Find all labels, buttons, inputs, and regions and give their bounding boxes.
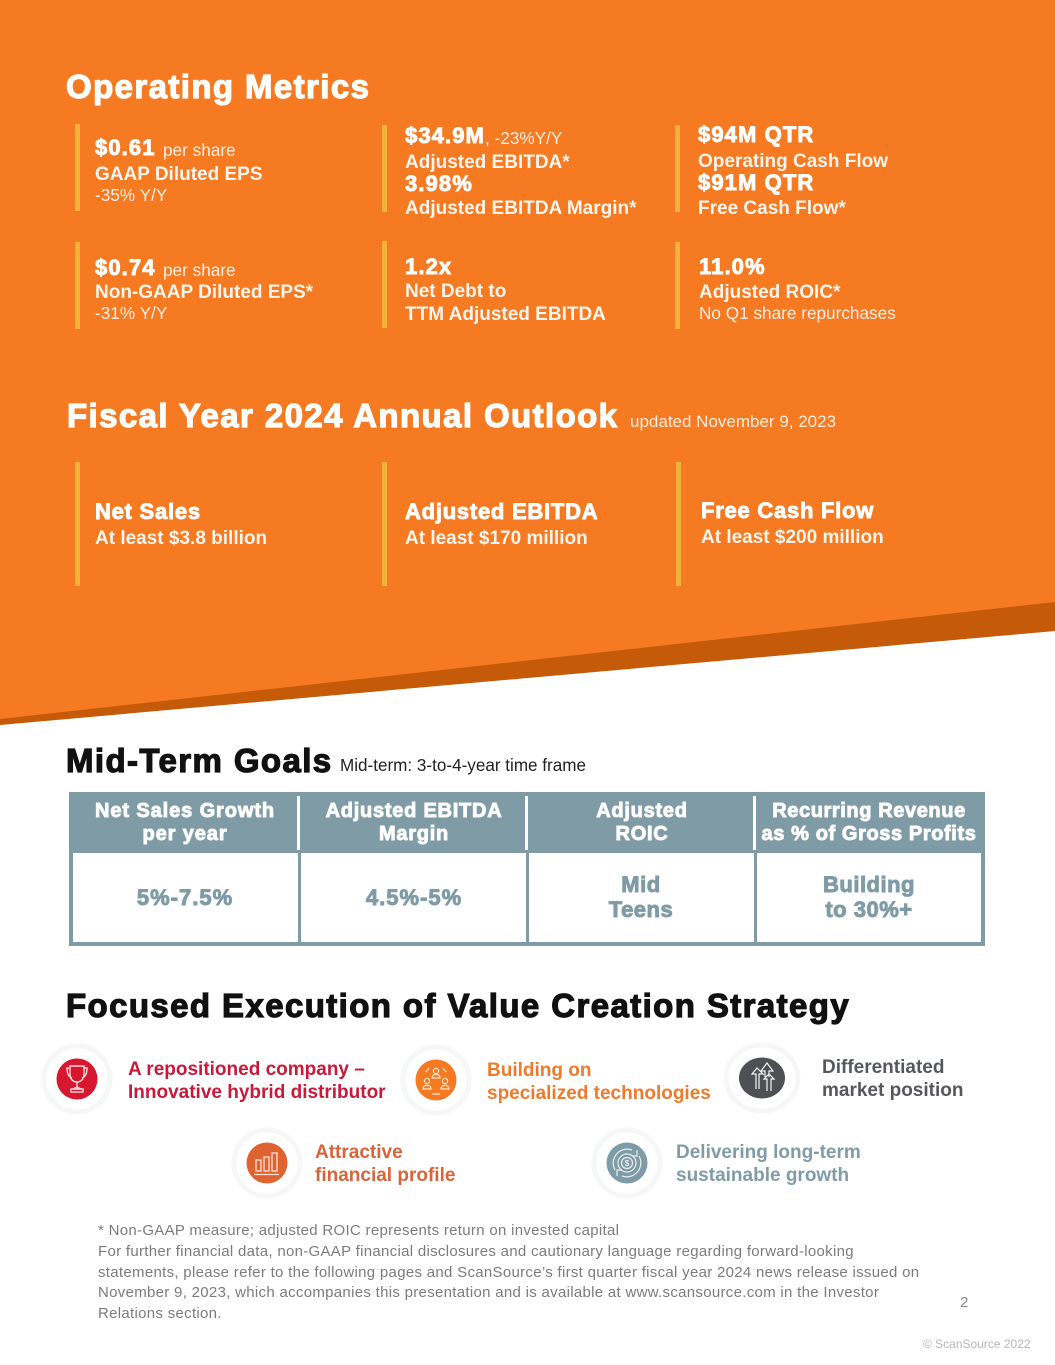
- column 3: [596, 800, 688, 845]
- table: mid-term goals: Building: [823, 872, 915, 897]
- outlook: Net Sales: [75, 462, 267, 586]
- heading: Mid-Term Goals: Mid-term: 3-to-4-year time frame: [340, 756, 586, 775]
- metric: Net Debt to TTM Adjusted EBITDA: 1.2x: [405, 254, 452, 279]
- metric: Adjusted EBITDA: , -23%Y/Y: [485, 128, 562, 148]
- strategy item: repositioned company: Innovative hybrid distributor: [128, 1082, 386, 1103]
- metric: Net Debt to TTM Adjusted EBITDA: Net Debt to: [405, 281, 506, 302]
- icon: circular dollar: $: [625, 1159, 630, 1168]
- metric: GAAP Diluted EPS: GAAP Diluted EPS: [95, 164, 263, 185]
- metric: Operating Cash Flow and Free Cash Flow: Free Cash Flow*: [698, 198, 846, 219]
- table body cell backgrounds: [73, 853, 298, 942]
- metric: Net Debt to TTM Adjusted EBITDA: TTM Adjusted EBITDA: [405, 304, 606, 325]
- column 4: Recurring Revenue: [772, 800, 966, 822]
- outlook: Net Sales: Net Sales: [95, 499, 201, 524]
- page number: 2: [960, 1294, 968, 1311]
- icon: trophy: [42, 1044, 112, 1114]
- metric: Adjusted ROIC: 11.0%: [699, 254, 766, 279]
- metric: GAAP Diluted EPS: $0.61: [95, 135, 156, 160]
- table: mid-term goals: to 30%+: [825, 897, 913, 922]
- metric: Operating Cash Flow and Free Cash Flow: Operating Cash Flow: [698, 151, 888, 172]
- strategy item: specialized technologies: specialized technologies: [487, 1083, 711, 1104]
- outlook: Adjusted EBITDA: Adjusted EBITDA: [405, 499, 598, 524]
- outlook: Adjusted EBITDA: At least $170 million: [405, 528, 588, 549]
- metric: Operating Cash Flow and Free Cash Flow: $94M QTR: [698, 122, 814, 147]
- table: mid-term goals: [69, 792, 985, 946]
- metric: Non-GAAP Diluted EPS: -31% Y/Y: [95, 303, 167, 323]
- metric: Adjusted EBITDA: Adjusted EBITDA*: [405, 152, 570, 173]
- metric: Non-GAAP Diluted EPS: Non-GAAP Diluted EPS*: [95, 282, 313, 303]
- strategy item: differentiated market position: market position: [822, 1080, 963, 1101]
- footnote text: statements, please refer to the following pages and ScanSource’s first quarter fiscal year 2024 news release issued on: [98, 1264, 919, 1281]
- heading: Focused Execution of Value Creation Strategy: Focused Execution of Value Creation Strategy: [66, 987, 850, 1024]
- strategy item: repositioned company: A repositioned company –: [128, 1059, 365, 1080]
- metric: Adjusted EBITDA: $34.9M: [405, 123, 485, 148]
- metric: Non-GAAP Diluted EPS: [75, 242, 314, 329]
- icon: bar chart: [232, 1128, 302, 1198]
- footnote text: November 9, 2023, which accompanies this presentation and is available at www.scansource.com in the Investor: [98, 1284, 879, 1301]
- column 1: [95, 800, 275, 845]
- metric: Adjusted ROIC: No Q1 share repurchases: [699, 303, 896, 323]
- orange banner background: [0, 0, 1055, 725]
- metric: Non-GAAP Diluted EPS: per share: [163, 260, 236, 280]
- heading: Mid-Term Goals: Mid-Term Goals: [66, 742, 333, 779]
- table: mid-term goals: Mid: [621, 872, 661, 897]
- footnote text: Relations section.: [98, 1305, 222, 1322]
- heading: Fiscal Year 2024 Annual Outlook: Fiscal Year 2024 Annual Outlook: [67, 397, 618, 434]
- heading: Operating Metrics: Operating Metrics: [66, 68, 370, 105]
- metric: Operating Cash Flow and Free Cash Flow: [675, 122, 888, 219]
- strategy item: long-term sustainable growth: [592, 1128, 861, 1198]
- metric: Non-GAAP Diluted EPS: $0.74: [95, 255, 156, 280]
- metric: Operating Cash Flow and Free Cash Flow: $91M QTR: [698, 170, 814, 195]
- icon: circular dollar: [592, 1128, 662, 1198]
- table: mid-term goals: 5%-7.5%: [137, 885, 233, 910]
- outlook: Free Cash Flow: At least $200 million: [701, 527, 884, 548]
- strategy item: long-term sustainable growth: Delivering long-term: [676, 1142, 861, 1163]
- footnote text: * Non-GAAP measure; adjusted ROIC represents return on invested capital: [98, 1222, 619, 1239]
- table: mid-term goals: 4.5%-5%: [366, 885, 462, 910]
- column 2: Adjusted EBITDA: [326, 800, 502, 822]
- strategy item: attractive financial profile: Attractive: [315, 1142, 403, 1163]
- outlook: Adjusted EBITDA: [382, 462, 598, 586]
- strategy item: differentiated market position: Differentiated: [822, 1057, 944, 1078]
- outlook: Net Sales: At least $3.8 billion: [95, 528, 267, 549]
- metric: Adjusted EBITDA: [382, 123, 637, 219]
- strategy item: specialized technologies: [400, 1044, 711, 1116]
- metric: Adjusted EBITDA: Adjusted EBITDA Margin*: [405, 198, 637, 219]
- table: mid-term goals: Teens: [609, 897, 673, 922]
- strategy item: attractive financial profile: financial profile: [315, 1165, 455, 1186]
- metric: Adjusted EBITDA: 3.98%: [405, 171, 473, 196]
- heading: Fiscal Year 2024 Annual Outlook: updated November 9, 2023: [630, 412, 836, 431]
- column 4: as % of Gross Profits: [762, 823, 976, 845]
- footnote text: [98, 1222, 919, 1322]
- metric: Adjusted ROIC: Adjusted ROIC*: [699, 282, 840, 303]
- outlook: Free Cash Flow: Free Cash Flow: [701, 498, 874, 523]
- metric: Net Debt to TTM Adjusted EBITDA: [382, 241, 606, 328]
- icon: arrows up: [724, 1042, 800, 1114]
- metric: Adjusted ROIC: [675, 242, 896, 329]
- column 3: ROIC: [616, 823, 668, 845]
- outlook: Free Cash Flow: [676, 462, 884, 586]
- footnote text: For further financial data, non-GAAP financial disclosures and cautionary language regarding forward-looking: [98, 1243, 854, 1260]
- column 1: Net Sales Growth: [95, 800, 275, 822]
- strategy item: long-term sustainable growth: sustainable growth: [676, 1165, 849, 1186]
- metric: GAAP Diluted EPS: [75, 124, 263, 211]
- heading: Mid-Term Goals: [66, 742, 586, 779]
- strategy item: repositioned company: [42, 1044, 386, 1114]
- column 2: Margin: [379, 823, 449, 845]
- column 1: per year: [142, 823, 228, 845]
- column 4: [762, 800, 976, 845]
- column 3: Adjusted: [596, 800, 688, 822]
- strategy item: attractive financial profile: [232, 1128, 455, 1198]
- column 2: [326, 800, 502, 845]
- strategy item: differentiated market position: [724, 1042, 963, 1114]
- strategy item: specialized technologies: Building on: [487, 1060, 591, 1081]
- metric: GAAP Diluted EPS: -35% Y/Y: [95, 185, 167, 205]
- icon: people circle: [400, 1044, 472, 1116]
- copyright: © ScanSource 2022: [923, 1337, 1031, 1351]
- metric: GAAP Diluted EPS: per share: [163, 140, 236, 160]
